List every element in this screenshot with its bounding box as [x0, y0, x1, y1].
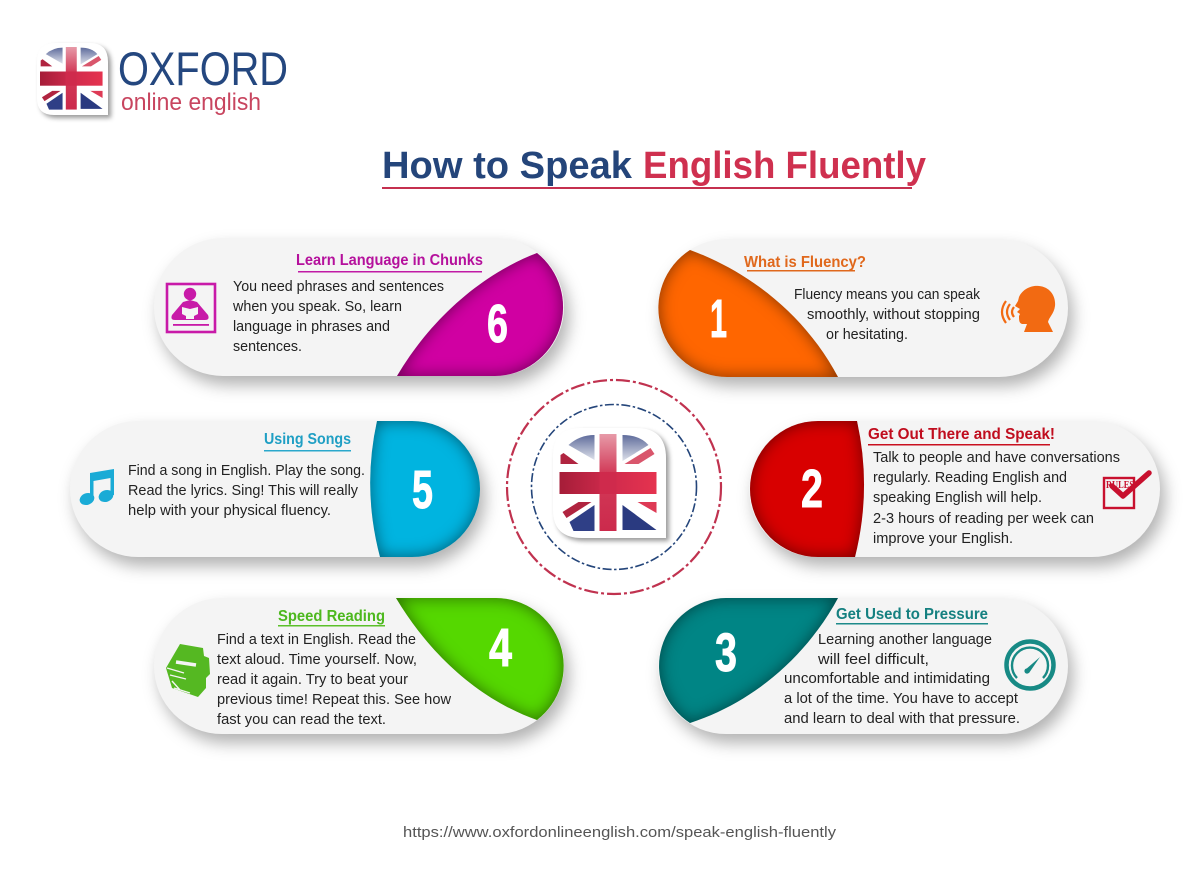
number 6: 6: [487, 294, 508, 354]
outer dashed ring: [507, 380, 721, 594]
icon: rules checkmark: RULES: [1106, 480, 1134, 491]
body text: [873, 449, 1120, 547]
icon: person reading: [167, 284, 215, 332]
icon: central flag: [553, 428, 666, 538]
body text: a lot of the time. You have to accept: [784, 690, 1019, 707]
red number shape: [750, 421, 864, 557]
title: [382, 145, 926, 189]
pill background: [749, 421, 1160, 557]
footer URL: https://www.oxfordonlineenglish.com/speak-english-fluently: [403, 824, 837, 841]
icon: stack of books: [166, 644, 210, 697]
heading underline: [836, 623, 988, 624]
body text: regularly. Reading English and: [873, 469, 1067, 486]
orange number shape: [658, 250, 838, 377]
body text: [232, 278, 444, 355]
body text: help with your physical fluency.: [128, 502, 331, 519]
icon: speedometer gauge: [1006, 642, 1054, 688]
logo tagline: online english: [121, 89, 261, 116]
icon: rules checkmark: [1104, 473, 1149, 508]
magenta number shape: [397, 253, 563, 376]
body text: [217, 631, 451, 728]
heading: Learn Language in Chunks: [296, 252, 483, 269]
logo: Oxford Online English: [37, 42, 288, 116]
pill background: [70, 421, 480, 557]
panel 5: Using Songs: [70, 421, 480, 557]
panel 3: Get Used to Pressure: [658, 598, 1068, 734]
panel 4: Speed Reading: [154, 598, 564, 734]
icon: music notes: [78, 469, 115, 507]
panel 6: Learn Language in Chunks: [154, 238, 564, 376]
number 5: 5: [412, 460, 433, 520]
inner dashed ring: [532, 404, 696, 570]
body text: speaking English will help.: [873, 489, 1042, 506]
body text: Read the lyrics. Sing! This will really: [128, 482, 358, 499]
body text: and learn to deal with that pressure.: [784, 710, 1020, 727]
body text: will feel difficult,: [817, 651, 929, 668]
body text: or hesitating.: [826, 326, 908, 343]
body text: previous time! Repeat this. See how: [217, 691, 451, 708]
number 1: 1: [710, 289, 727, 349]
heading underline: [298, 271, 482, 272]
body text: Talk to people and have conversations: [873, 449, 1120, 466]
body text: Fluency means you can speak: [794, 286, 980, 303]
teal number shape: [659, 598, 838, 723]
number 2: 2: [801, 459, 823, 519]
pill background: [154, 598, 564, 734]
body text: improve your English.: [873, 530, 1013, 547]
heading underline: [264, 450, 351, 452]
pill background: [658, 598, 1068, 734]
central emblem: [507, 380, 721, 594]
body text: sentences.: [233, 338, 302, 355]
panel 2: Get Out There and Speak!: [749, 421, 1160, 557]
body text: fast you can read the text.: [217, 711, 386, 728]
icon: speaking head: [1002, 286, 1055, 332]
body text: Learning another language: [818, 631, 992, 648]
heading: Using Songs: [264, 431, 351, 448]
heading: Speed Reading: [278, 608, 385, 625]
title: navy part: How to Speak: [382, 145, 633, 187]
body text: Find a text in English. Read the: [217, 631, 416, 648]
title underline: [382, 187, 912, 189]
logo wordmark: OXFORD: [118, 42, 288, 95]
body text: [794, 286, 980, 343]
icon: logo flag: [37, 43, 108, 115]
body text: read it again. Try to beat your: [217, 671, 408, 688]
body text: [784, 631, 1020, 727]
pill background: [154, 238, 564, 376]
body text: text aloud. Time yourself. Now,: [217, 651, 417, 668]
body text: when you speak. So, learn: [232, 298, 402, 315]
body text: 2-3 hours of reading per week can: [873, 510, 1094, 527]
heading underline: [868, 444, 1050, 446]
green number shape: [396, 598, 564, 720]
blue number shape: [370, 421, 480, 557]
number 3: 3: [715, 623, 737, 683]
heading: What is Fluency?: [744, 254, 866, 271]
body text: You need phrases and sentences: [233, 278, 444, 295]
body text: [128, 462, 365, 519]
title: red part: English Fluently: [643, 145, 926, 187]
heading: Get Used to Pressure: [836, 606, 988, 623]
body text: uncomfortable and intimidating: [784, 670, 990, 687]
heading underline: [278, 625, 385, 626]
pill background: [658, 239, 1068, 377]
body text: language in phrases and: [233, 318, 390, 335]
body text: Find a song in English. Play the song.: [128, 462, 365, 479]
heading underline: [747, 270, 855, 272]
heading: Get Out There and Speak!: [868, 426, 1055, 443]
panel 1: What is Fluency?: [658, 239, 1068, 377]
body text: smoothly, without stopping: [807, 306, 980, 323]
number 4: 4: [489, 618, 512, 678]
